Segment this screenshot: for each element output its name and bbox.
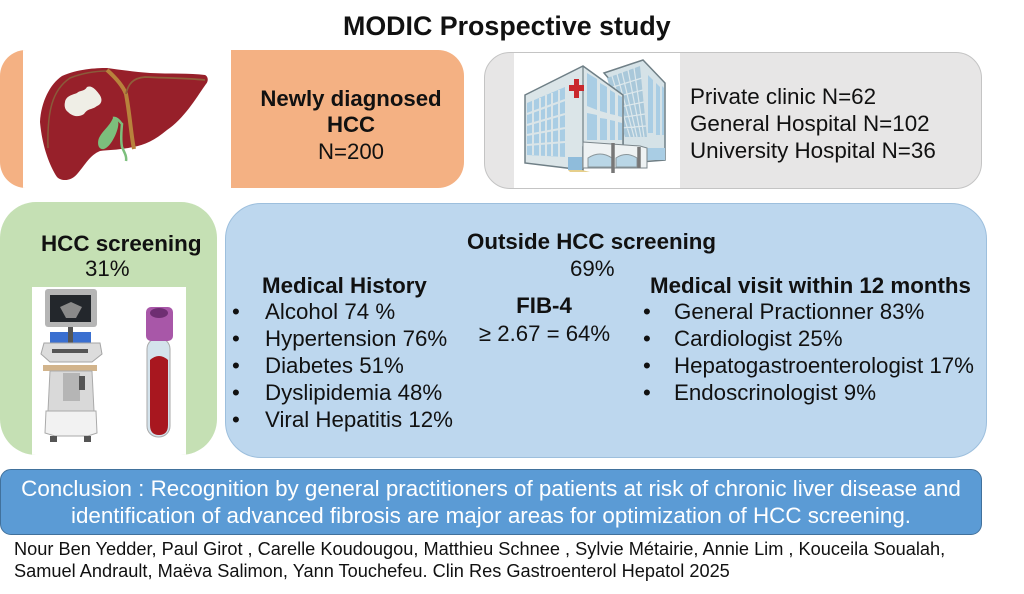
FIB-4 result [479,293,610,346]
panel: hospital types [484,52,982,189]
column: medical visit: • [643,299,651,324]
heading: newly diagnosed HCC: HCC [327,112,375,137]
callout: conclusion: identification of advanced fibrosis are major areas for optimization of HCC screening. [71,502,911,528]
column: medical visit: • [643,326,651,351]
heading: outside HCC screening: Outside HCC screening [467,229,716,254]
column: medical history: • [232,380,240,405]
panel: HCC screening [0,202,217,455]
text: 69%: 69% [570,256,615,281]
text: FIB-4 value: ≥ 2.67 = 64% [479,321,610,346]
text: hospital counts [690,84,936,163]
heading: newly diagnosed HCC [260,86,442,164]
list: medical visit items: General Practionner 83% [674,299,924,324]
text: authors and citation [14,539,945,581]
column: medical visit: • [643,353,651,378]
list: medical visit items: Cardiologist 25% [674,326,843,351]
list: medical history items: Diabetes 51% [265,353,404,378]
text: authors and citation: Samuel Andrault, Maëva Salimon, Yann Touchefeu. Clin Res Gastroenterol Hepatol 2025 [14,561,730,581]
heading: newly diagnosed HCC: Newly diagnosed [260,86,442,110]
column: medical visit: • [643,380,651,405]
heading: newly diagnosed HCC: N=200 [318,138,384,164]
list: medical visit items: Hepatogastroenterologist 17% [674,353,974,378]
list: medical visit items [643,299,974,405]
column: medical history: • [232,407,240,432]
heading: HCC screening: HCC screening [41,231,202,256]
column: medical visit [643,273,974,405]
column: medical history [232,273,453,432]
callout: conclusion [0,469,982,535]
heading: medical history: Medical History [262,273,427,298]
list: medical history items: Dyslipidemia 48% [265,380,442,405]
column: medical history: • [232,353,240,378]
column: medical history: • [232,299,240,324]
title: MODIC Prospective study [343,11,671,41]
text: hospital counts: Private clinic N=62 [690,84,876,109]
panel: outside HCC screening [225,203,987,458]
list: medical history items: Viral Hepatitis 12% [265,407,453,432]
icon: liver [23,50,231,188]
text: 31%: 31% [85,256,130,281]
text: authors and citation: Nour Ben Yedder, Paul Girot , Carelle Koudougou, Matthieu Schnee , Sylvie Métairie, Annie Lim , Kouceila Soualah, [14,539,945,559]
list: medical history items: Hypertension 76% [265,326,447,351]
callout: conclusion: Conclusion : Recognition by general practitioners of patients at risk of chronic liver disease and [21,476,961,501]
panel: newly diagnosed HCC [0,50,464,188]
column: medical history: • [232,326,240,351]
text: hospital counts: General Hospital N=102 [690,111,930,136]
list: medical visit items: Endoscrinologist 9% [674,380,876,405]
heading: FIB-4: FIB-4 [516,293,572,318]
icon: ultrasound machine and blood tube [32,287,186,455]
list: medical history items [232,299,453,432]
heading: medical visit within 12 months: Medical visit within 12 months [650,273,971,298]
list: medical history items: Alcohol 74 % [265,299,395,324]
text: hospital counts: University Hospital N=36 [690,138,936,163]
icon: hospital building [514,53,680,188]
